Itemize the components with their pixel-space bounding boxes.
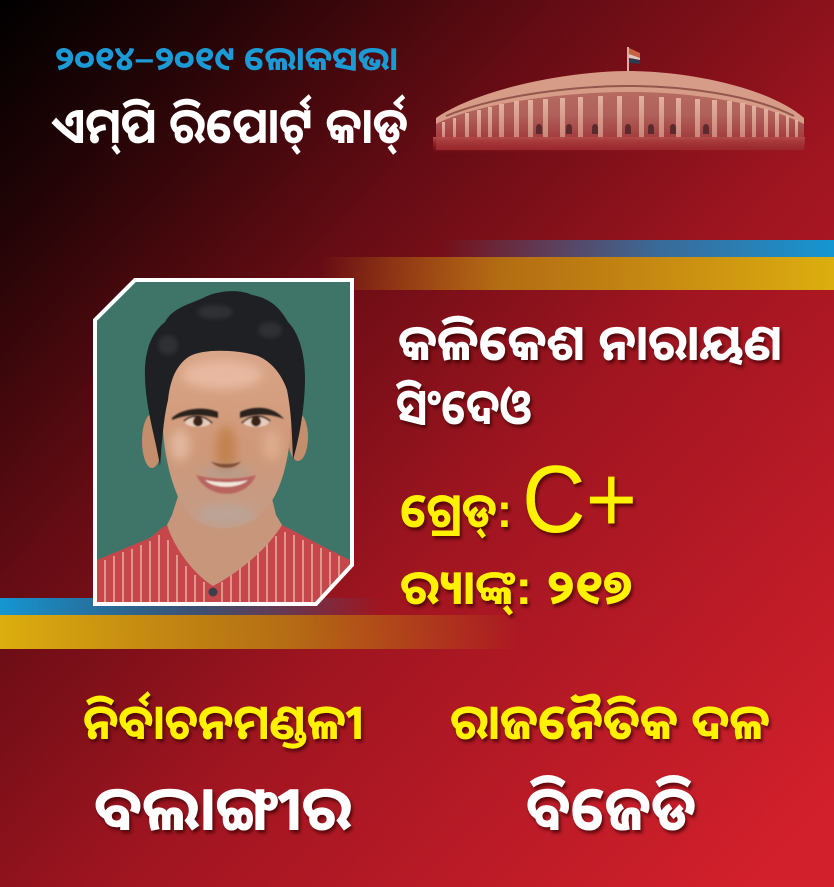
eyes: [184, 416, 270, 427]
MP name: ସିଂଦେଓ: [395, 379, 532, 435]
MP name: କଳିକେଶ ନାରାୟଣ: [398, 315, 782, 371]
neck: [167, 490, 282, 586]
rank: ର‍୍ୟାଙ୍କ୍: ୨୧୭: [400, 562, 632, 616]
ears: [142, 414, 162, 468]
bottom colour bands: [0, 598, 520, 649]
value: political party: ବିଜେଡି: [526, 775, 696, 844]
mouth: [196, 475, 256, 494]
value: constituency: ବଲାଙ୍ଗୀର: [94, 775, 352, 844]
button: [208, 588, 218, 596]
top colour bands: [320, 240, 834, 290]
label: political party: ରାଜନୈତିକ ଦଳ: [450, 693, 770, 750]
label: constituency: ନିର୍ବାଚନମଣ୍ଡଳୀ: [83, 691, 363, 750]
eyebrows: [172, 408, 284, 420]
face highlights and shadow: [170, 361, 282, 524]
portrait photo: [95, 280, 352, 604]
flag: [627, 47, 640, 97]
grade: C+: [522, 446, 637, 553]
shirt: [97, 525, 350, 604]
MP name: [395, 315, 782, 435]
hair highlights: [158, 305, 282, 355]
grade: [400, 446, 637, 553]
nose: [211, 461, 241, 468]
illustration: parliament building: [433, 47, 805, 154]
grade: ଗ୍ରେଡ୍:: [400, 485, 512, 539]
heading: years and Lok Sabha: ୨୦୧୪–୨୦୧୯ ଲୋକସଭା: [54, 40, 398, 77]
face: [162, 348, 291, 528]
hair: [145, 291, 305, 466]
heading: MP report card: ଏମ୍‌ପି ରିପୋର୍ଟ୍ କାର୍ଡ୍: [51, 94, 408, 155]
